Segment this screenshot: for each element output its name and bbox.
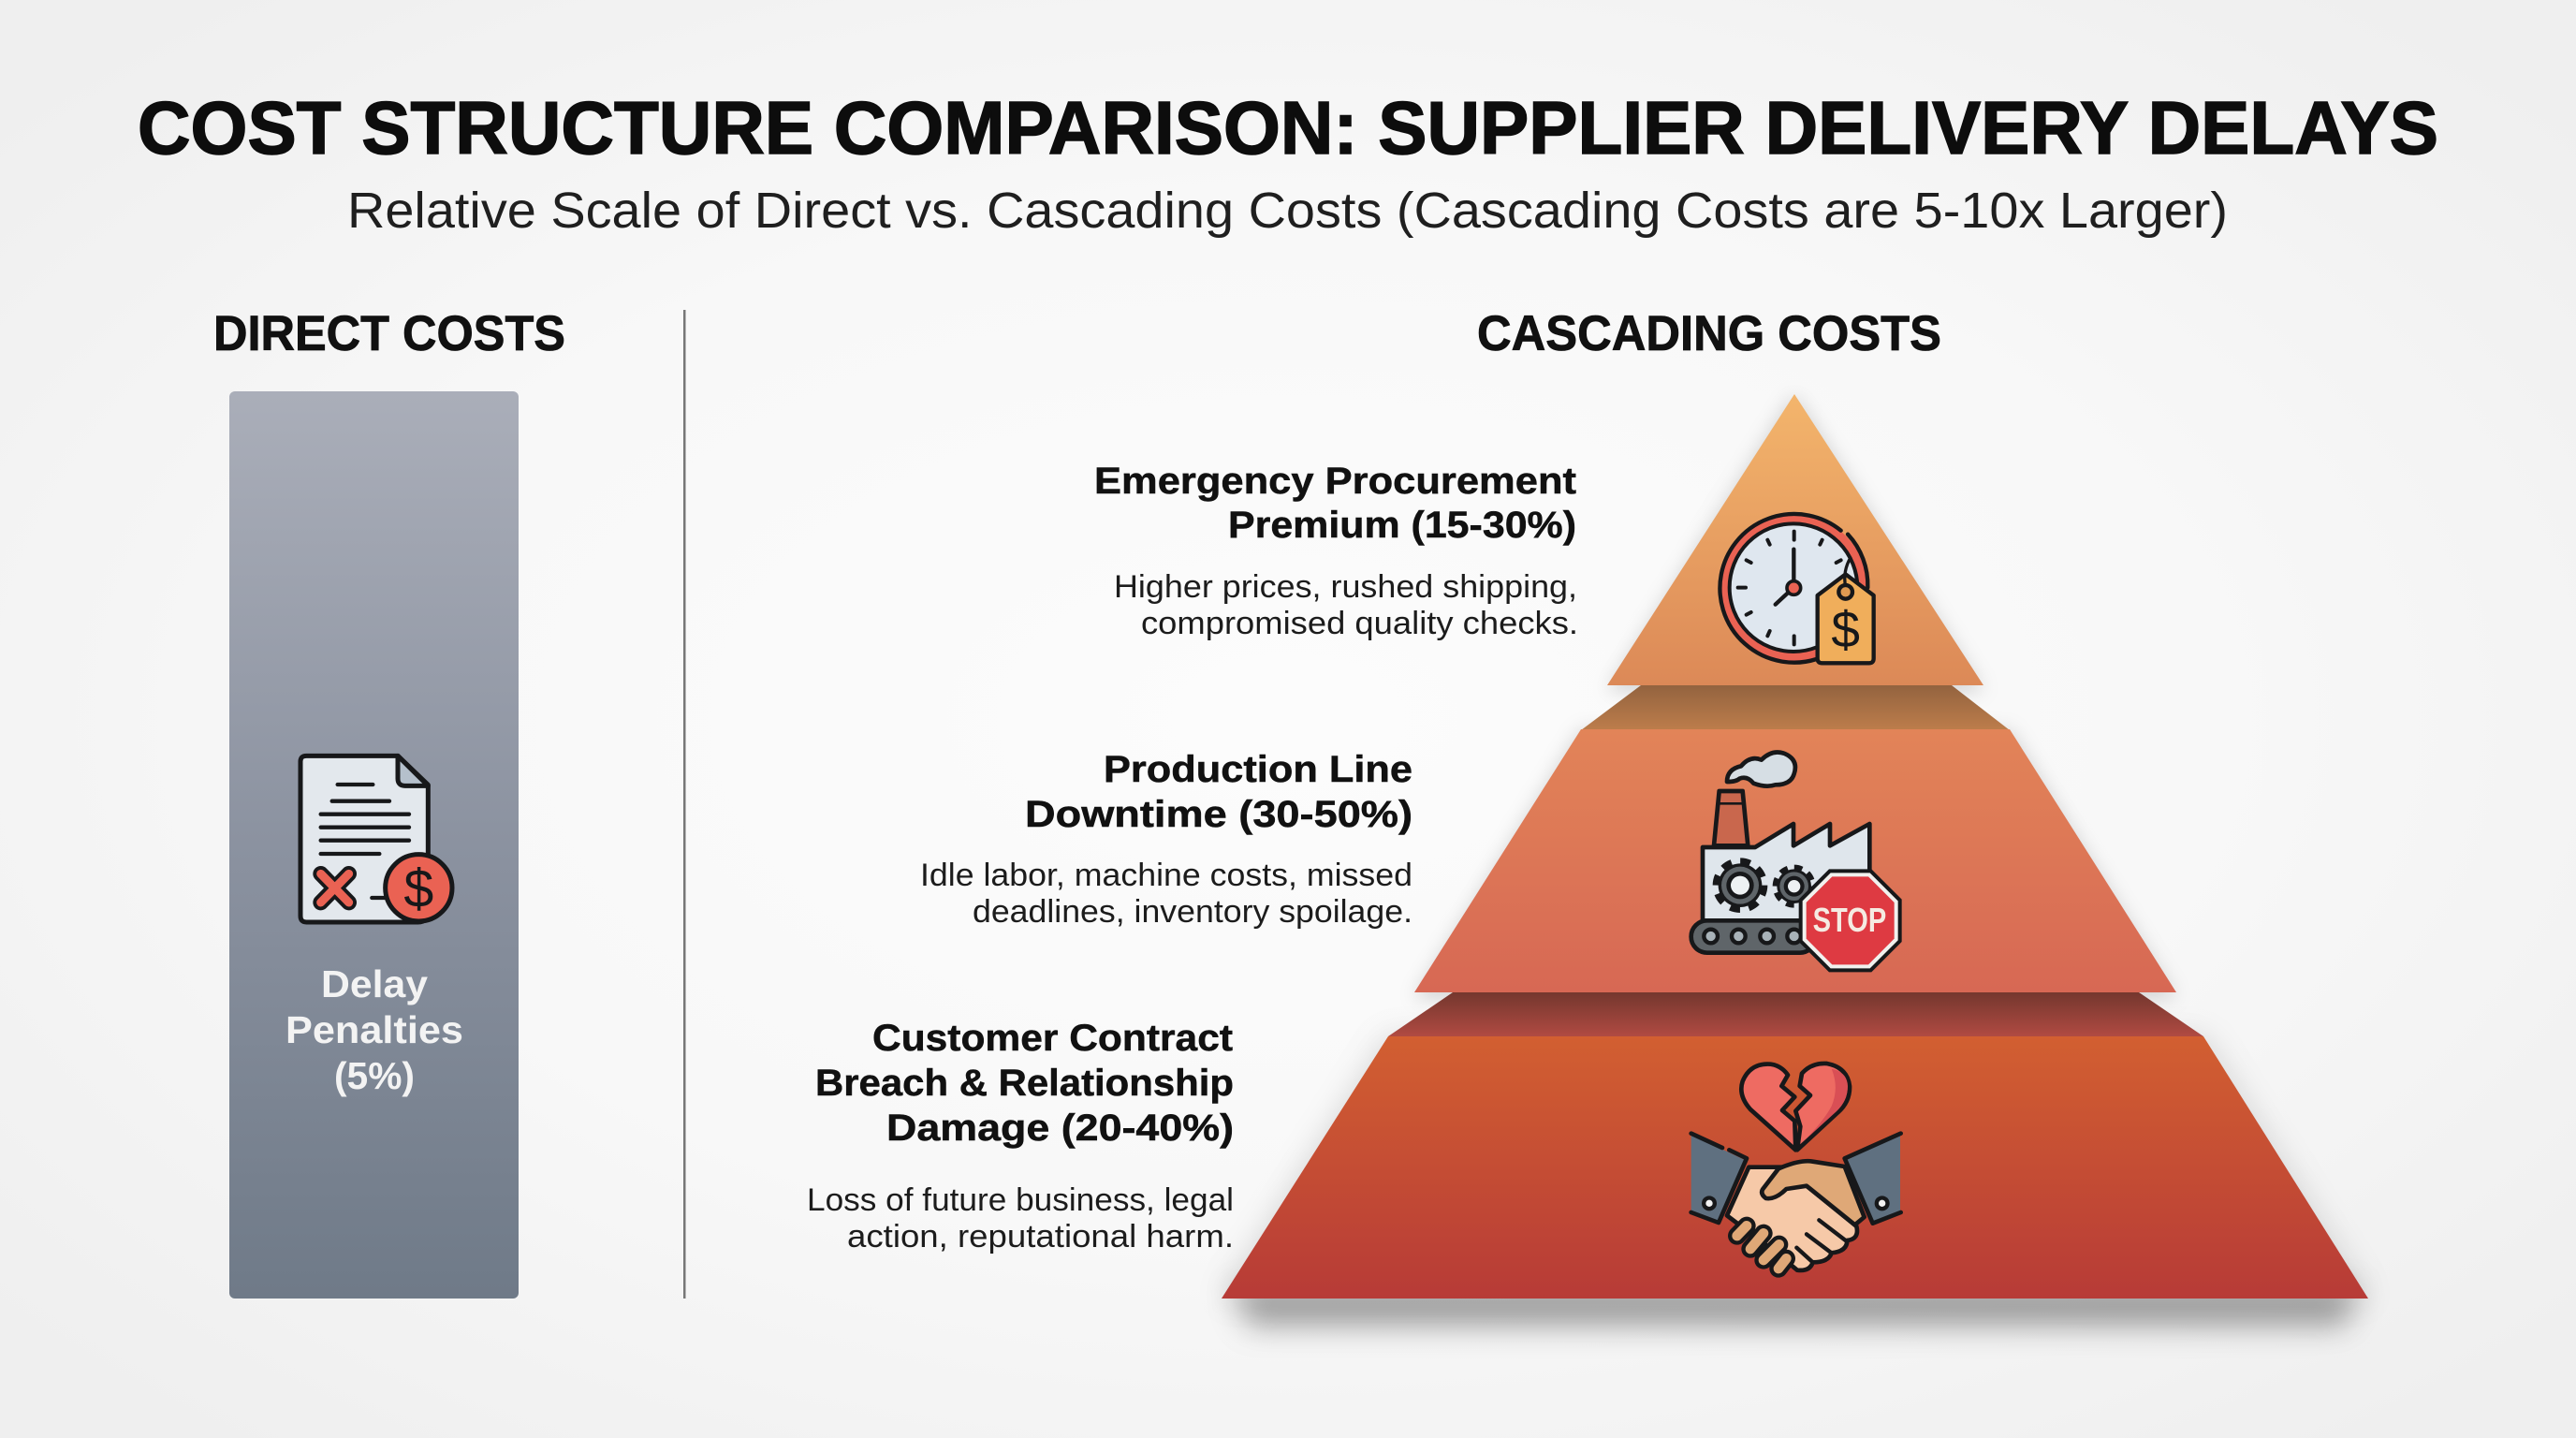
text block: customer contract breach: Damage (20-40%) (886, 1108, 1234, 1149)
heading: direct costs: DIRECT COSTS (213, 306, 565, 361)
text block: customer contract breach: Breach & Relationship (815, 1063, 1234, 1104)
label: delay penalties: (5%) (334, 1054, 415, 1097)
text block: production line downtime (920, 749, 1412, 930)
icon: factory with stop sign: STOP (1813, 901, 1886, 939)
text block: emergency procurement: compromised quality checks. (1141, 606, 1578, 641)
title: COST STRUCTURE COMPARISON: SUPPLIER DELIVERY DELAYS (138, 86, 2438, 169)
label: delay penalties: Penalties (285, 1008, 463, 1051)
middle tier: production downtime (1414, 729, 2176, 992)
text block: emergency procurement (1094, 461, 1578, 641)
divider (683, 310, 685, 1299)
icon: broken heart and handshake (1691, 1064, 1901, 1270)
icon: clock with price tag (1720, 514, 1874, 663)
subtitle: Relative Scale of Direct vs. Cascading Costs (Cascading Costs are 5-10x Larger) (347, 183, 2228, 239)
tier shadows (1222, 394, 2368, 1326)
text block: production line downtime: Idle labor, machine costs, missed (920, 858, 1412, 893)
text block: customer contract breach: Loss of future business, legal (807, 1182, 1234, 1218)
text block: customer contract breach (807, 1018, 1234, 1255)
icon: factory with stop sign (1691, 752, 1902, 972)
text block: emergency procurement: Higher prices, rushed shipping, (1114, 569, 1577, 605)
text block: customer contract breach: Customer Contract (872, 1018, 1233, 1059)
heading: cascading costs: CASCADING COSTS (1477, 306, 1941, 361)
icon: contract with penalty: $ (403, 858, 433, 918)
bottom tier: customer contract breach (1222, 1036, 2368, 1299)
text block: emergency procurement: Premium (15-30%) (1228, 505, 1576, 546)
icon: contract with penalty (300, 756, 452, 922)
text block: production line downtime: Downtime (30-50%) (1025, 794, 1412, 835)
label: delay penalties (285, 962, 463, 1097)
panel: direct costs bar (229, 391, 519, 1299)
text block: production line downtime: deadlines, inventory spoilage. (973, 894, 1412, 930)
text block: production line downtime: Production Line (1104, 749, 1412, 790)
bottom tier band (1388, 992, 2203, 1036)
middle tier band (1581, 685, 2010, 730)
label: delay penalties: Delay (321, 962, 428, 1005)
text block: emergency procurement: Emergency Procurement (1094, 461, 1576, 502)
top tier: emergency procurement (1607, 394, 1983, 685)
text block: customer contract breach: action, reputational harm. (847, 1219, 1234, 1255)
pyramid: cascading costs (1222, 394, 2368, 1326)
icon: clock with price tag: $ (1831, 601, 1860, 659)
